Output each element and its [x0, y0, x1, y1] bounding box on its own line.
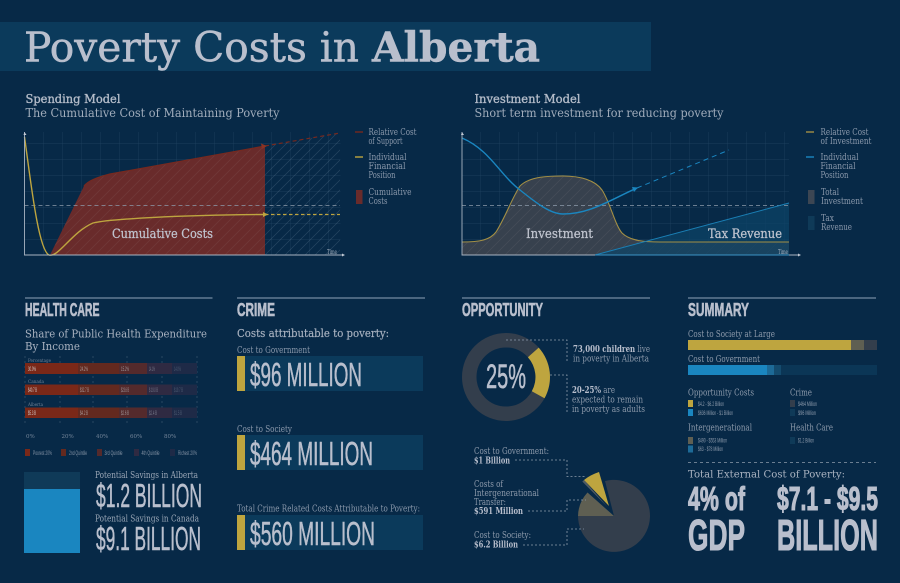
legend: income quintiles	[25, 449, 197, 457]
stacked bar chart: health expenditure by income: $2.4 B	[149, 411, 157, 417]
panel: investment model	[461, 91, 872, 256]
crime subheading: Costs attributable to poverty:	[237, 326, 389, 340]
legend: spending model: Position	[368, 171, 396, 181]
callout: children in poverty: in poverty as adults	[572, 405, 645, 415]
spending model heading: Spending Model	[26, 91, 120, 106]
legend: health care: $1.2 Billion	[798, 438, 814, 444]
stacked bar chart: health expenditure by income: 40%	[96, 434, 108, 440]
legend: income quintiles: Richest 20%	[178, 450, 197, 457]
panel: summary	[688, 298, 878, 560]
stacked bar chart: health expenditure by income: $2.6 B	[121, 411, 129, 417]
legend: income quintiles: Poorest 20%	[33, 450, 52, 457]
stacked bar chart: health expenditure by income: Canada	[28, 379, 44, 385]
legend: income quintiles: 3rd Quintile	[104, 450, 123, 457]
bar: cost to society at large	[688, 330, 877, 350]
investment model heading: Short term investment for reducing poverty	[474, 105, 724, 120]
stat: 4% of GDP: 4% of	[688, 480, 746, 517]
legend: investment model: Financial	[820, 162, 856, 172]
legend: spending model: Costs	[368, 197, 388, 207]
callout: savings figures: $1.2 BILLION	[96, 477, 202, 514]
chart: investment model: Time	[778, 248, 788, 256]
health care subheading: Share of Public Health Expenditure	[25, 326, 207, 340]
stacked bar chart: health expenditure by income: 24.2%	[80, 367, 88, 373]
stat: cost to government	[237, 346, 423, 393]
stacked bar chart: health expenditure by income: $5.3 B	[28, 411, 36, 417]
legend: spending model: Financial	[368, 162, 406, 172]
stacked bar chart: health expenditure by income: 20%	[62, 434, 74, 440]
stacked bar chart: health expenditure by income: $4.2 B	[80, 411, 88, 417]
health care subheading	[25, 326, 207, 353]
bar: cost to society at large: Cost to Society at Large	[688, 330, 775, 340]
pie labels: Transfer:	[474, 498, 506, 508]
callout: savings figures: Potential Savings in Alberta	[95, 471, 198, 481]
chart: spending model: Cumulative Costs	[112, 227, 213, 242]
chart: spending model: Time	[327, 248, 337, 256]
legend: intergenerational: Intergenerational	[688, 424, 752, 434]
legend: opportunity costs	[688, 388, 754, 417]
opportunity heading: OPPORTUNITY	[462, 300, 543, 320]
stacked bar chart: health expenditure by income	[25, 356, 197, 440]
donut chart: 25%: 25%	[486, 358, 526, 396]
legend: investment model: Revenue	[821, 223, 852, 233]
stat: cost to society: $464 MILLION	[250, 435, 373, 472]
pie labels: $1 Billion	[474, 456, 510, 466]
stat: cost to society	[237, 425, 423, 472]
stacked bar chart: health expenditure by income: $1.5 B	[174, 411, 182, 417]
pie labels: $6.2 Billion	[474, 540, 518, 550]
legend: intergenerational: $63 - $78 Million	[698, 446, 723, 453]
pie labels: $591 Million	[474, 507, 523, 517]
callout: savings figures	[95, 471, 202, 557]
stacked bar chart: health expenditure by income: 14.0%	[174, 367, 181, 373]
legend: investment model: Relative Cost	[820, 128, 869, 138]
pie labels	[474, 447, 549, 550]
legend: opportunity costs: Opportunity Costs	[688, 388, 754, 398]
stacked bar chart: health expenditure by income: 60%	[130, 434, 142, 440]
stacked bar chart: health expenditure by income: 15.2%	[121, 367, 129, 373]
stacked bar chart: health expenditure by income: 0%	[26, 434, 35, 440]
callout: children in poverty: 73,000 children live	[573, 345, 650, 355]
stacked bar chart: health expenditure by income: 14.1%	[149, 367, 155, 373]
stat: total crime costs: $560 MILLION	[250, 515, 375, 552]
legend: spending model: of Support	[368, 137, 403, 147]
legend: spending model	[355, 128, 417, 207]
panel: spending model	[24, 91, 417, 256]
stacked bar chart: health expenditure by income: $19.7 B	[174, 388, 183, 394]
panel: health care	[24, 298, 212, 557]
health care subheading: By Income	[25, 339, 80, 353]
pie labels: Costs of	[474, 480, 504, 490]
legend: intergenerational: $490 - $553 Million	[698, 438, 727, 444]
stat: total crime costs: Total Crime Related Costs Attributable to Poverty:	[237, 504, 420, 514]
stacked bar chart: health expenditure by income: $23.6 B	[121, 388, 129, 394]
legend: income quintiles: 4th Quintile	[142, 450, 160, 457]
callout: savings figures: Potential Savings in Canada	[95, 514, 199, 524]
stat: 4% of GDP: GDP	[688, 511, 745, 560]
title banner: Poverty Costs in Alberta	[24, 24, 540, 72]
legend: spending model: Relative Cost	[368, 128, 417, 138]
stat: total crime costs	[237, 504, 423, 552]
investment model heading	[474, 91, 724, 120]
chart: potential savings block	[24, 472, 80, 553]
bar: cost to government	[688, 355, 877, 375]
legend: investment model: Individual	[820, 153, 859, 163]
panel: crime	[237, 298, 425, 552]
callout: children in poverty: in poverty in Alberta	[573, 354, 649, 364]
summary heading: SUMMARY	[688, 300, 749, 320]
spending model heading	[26, 91, 280, 120]
legend: crime: Crime	[790, 388, 812, 398]
chart: investment model: Investment	[526, 227, 594, 242]
pie chart: cost breakdown	[578, 472, 650, 552]
legend: crime	[790, 388, 817, 417]
legend: spending model: Individual	[368, 153, 407, 163]
legend: investment model: Tax	[821, 214, 834, 224]
legend: investment model	[806, 128, 872, 233]
bar: cost to government: Cost to Government	[688, 355, 760, 365]
callout: children in poverty: expected to remain	[572, 396, 643, 406]
legend: investment model: of Investment	[820, 137, 872, 147]
legend: crime: $96 Million	[798, 410, 816, 417]
stacked bar chart: health expenditure by income: Percentage	[28, 358, 51, 364]
stacked bar chart: health expenditure by income: Alberta	[27, 402, 43, 408]
stacked bar chart: health expenditure by income: $40.7 B	[28, 388, 37, 394]
legend: investment model: Position	[820, 171, 849, 181]
callout: children in poverty	[572, 345, 650, 415]
chart: spending model	[24, 132, 345, 256]
stacked bar chart: health expenditure by income: $ 19.0 B	[149, 388, 158, 394]
legend: income quintiles: 2nd Quintile	[69, 450, 87, 457]
legend: health care	[790, 424, 833, 444]
legend: intergenerational	[688, 424, 752, 453]
stat: cost to government: Cost to Government	[237, 346, 310, 356]
callout: savings figures: $9.1 BILLION	[96, 520, 201, 557]
legend: spending model: Cumulative	[368, 188, 412, 198]
spending model heading: The Cumulative Cost of Maintaining Poverty	[26, 105, 280, 120]
stacked bar chart: health expenditure by income: $32.7 B	[80, 388, 89, 394]
callout lines: pie	[515, 460, 586, 545]
total external cost heading: Total External Cost of Poverty:	[688, 468, 845, 480]
legend: crime: $464 Million	[798, 401, 817, 408]
legend: opportunity costs: $636 Million - $1 Billion	[698, 410, 733, 417]
pie labels: Intergenerational	[474, 489, 539, 499]
chart: investment model	[461, 132, 801, 256]
callout: children in poverty: 20-25% are	[572, 386, 615, 396]
callout lines: donut	[506, 340, 567, 412]
health care heading: HEALTH CARE	[25, 300, 100, 320]
stat: cost to society: Cost to Society	[237, 425, 292, 435]
legend: investment model: Total	[821, 188, 839, 198]
stat: 4% of GDP	[688, 480, 746, 560]
legend: opportunity costs: $4.2 - $6.2 Billion	[698, 401, 724, 408]
donut chart: 25%	[469, 340, 550, 414]
chart: investment model: Tax Revenue	[708, 227, 782, 242]
pie labels: Cost to Government:	[474, 447, 549, 457]
stacked bar chart: health expenditure by income: 30.0%	[28, 367, 36, 373]
crime heading: CRIME	[237, 300, 275, 320]
investment model heading: Investment Model	[474, 91, 581, 106]
stacked bar chart: health expenditure by income: 80%	[164, 434, 176, 440]
legend: health care: Health Care	[790, 424, 833, 434]
pie labels: Cost to Society:	[474, 531, 531, 541]
stat: $7.1 - $9.5 billion	[777, 480, 878, 560]
stat: cost to government: $96 MILLION	[250, 356, 362, 393]
legend: investment model: Investment	[821, 197, 863, 207]
panel: opportunity	[462, 298, 650, 552]
